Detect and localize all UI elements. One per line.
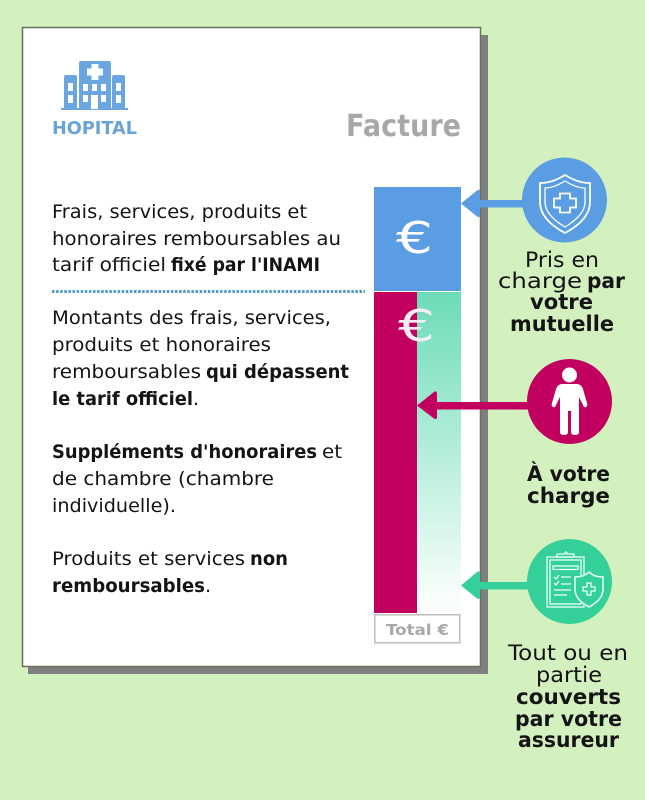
text block: INAMI: tarif officiel [52, 254, 166, 276]
label: mutuelle: charge [498, 269, 582, 294]
icon: person [527, 359, 612, 444]
text block: depassements: remboursables [52, 361, 201, 383]
text block: supplements: de chambre (chambre [52, 468, 274, 490]
bar: mutuelle [374, 187, 461, 291]
label: assureur [507, 641, 628, 753]
label: a votre charge: À votre [527, 461, 610, 487]
text block: depassements: qui dépassent [206, 361, 349, 383]
total box: Total € [386, 621, 449, 639]
label: a votre charge: charge [527, 484, 610, 509]
text block: supplements [52, 441, 342, 517]
arrow: blue [461, 190, 530, 217]
text block: supplements: et [322, 441, 342, 463]
text block: depassements: le tarif officiel [52, 388, 193, 410]
text block: depassements [52, 307, 349, 410]
heading: facture: Facture [346, 109, 461, 144]
arrow: crimson [417, 391, 532, 419]
text block: supplements: Suppléments d'honoraires [52, 441, 317, 463]
text block: non remboursables: non [250, 548, 288, 570]
text block: non remboursables: remboursables [52, 575, 205, 597]
label: assureur: assureur [518, 728, 619, 753]
text block: INAMI: fixé par l'INAMI [171, 254, 320, 276]
text block: depassements: produits et honoraires [52, 334, 271, 356]
text block: non remboursables: Produits et services [52, 548, 245, 570]
bar: assureur gradient [417, 292, 461, 613]
label: assureur: couverts [516, 685, 621, 710]
text block: INAMI: Frais, services, produits et [52, 201, 307, 223]
icon: clipboard and shield [527, 539, 612, 624]
icon: euro crimson: € [398, 301, 435, 352]
icon: shield [522, 158, 607, 242]
text block: INAMI: honoraires remboursables au [52, 228, 341, 250]
label: assureur: Tout ou en [507, 641, 628, 666]
text block: INAMI [52, 201, 341, 276]
label: assureur: par votre [515, 707, 622, 732]
label: mutuelle [498, 248, 625, 337]
panel: invoice card [22, 28, 480, 666]
label: mutuelle: votre [530, 290, 593, 315]
label: mutuelle: par [587, 269, 625, 294]
text block: supplements: individuelle). [52, 495, 176, 517]
label: hopital: HOPITAL [52, 118, 137, 139]
text block: non remboursables: . [205, 575, 211, 597]
label: mutuelle: Pris en [525, 248, 599, 273]
label: mutuelle: mutuelle [510, 312, 614, 337]
icon: euro blue: € [396, 213, 433, 264]
panel shadow [28, 35, 488, 674]
bar: a votre charge [374, 292, 417, 613]
label: assureur: partie [536, 663, 602, 688]
text block: depassements: . [193, 388, 199, 410]
arrow: green [461, 571, 532, 599]
icon: hospital [61, 61, 128, 110]
text block: non remboursables [52, 548, 288, 597]
label: a votre charge [527, 461, 610, 509]
total box [375, 615, 460, 643]
text block: depassements: Montants des frais, services, [52, 307, 331, 329]
